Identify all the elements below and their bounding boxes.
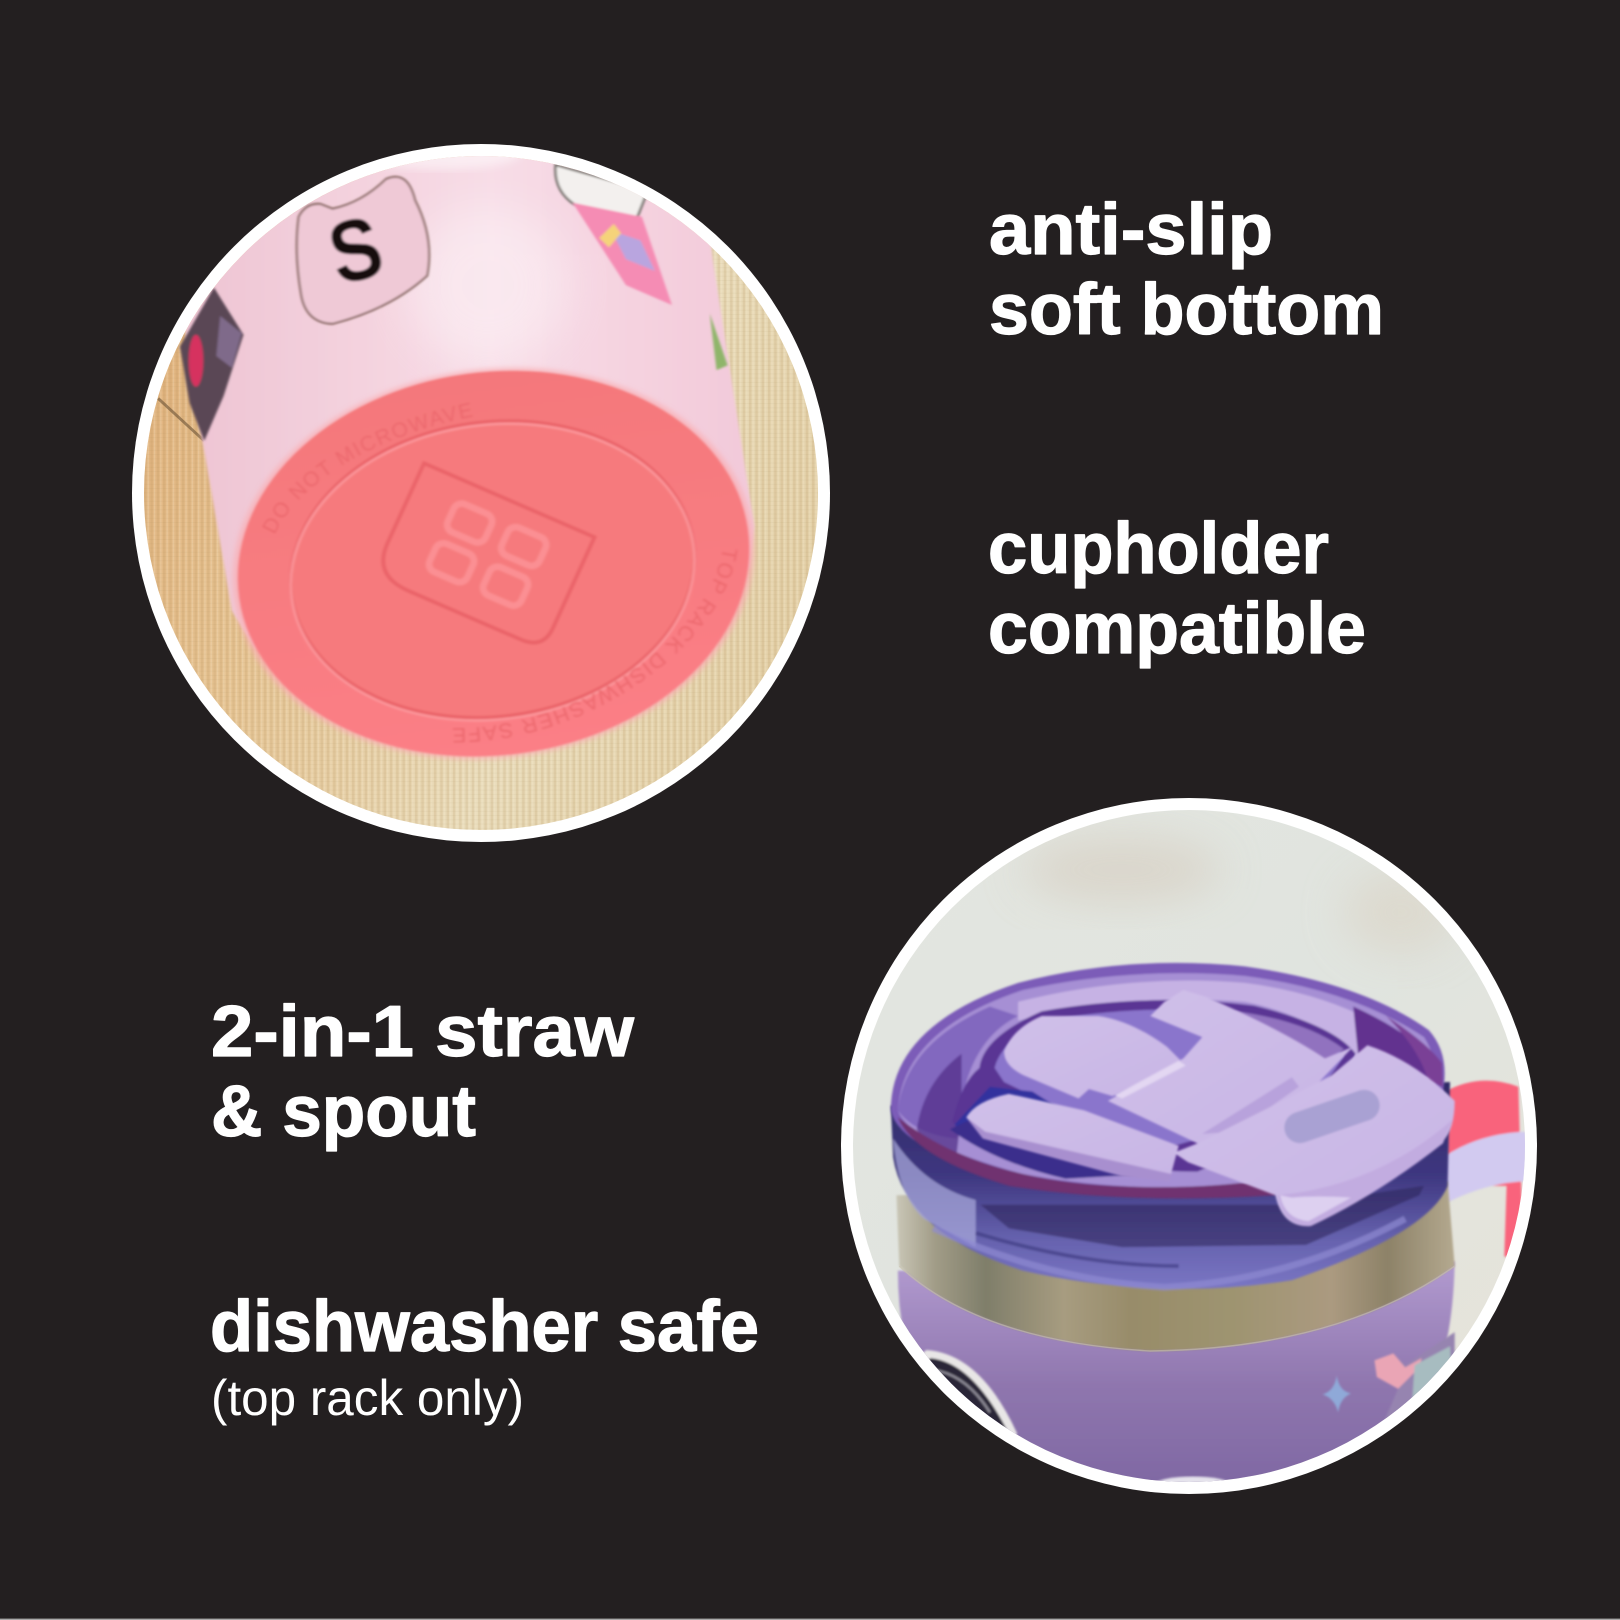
- cup body: [898, 1261, 1455, 1488]
- text: 2-in-1 straw and spout: 2-in-1 straw: [211, 992, 635, 1072]
- recess: [952, 1000, 1356, 1172]
- text: 2-in-1 straw and spout: & spout: [211, 1072, 476, 1152]
- decal: unicorn: [1374, 1332, 1456, 1419]
- top highlight: [394, 156, 516, 170]
- logo: [373, 463, 595, 649]
- decal: sparkle: [1323, 1376, 1351, 1412]
- text: dishwasher safe: [210, 1287, 759, 1426]
- cup body: [173, 120, 754, 649]
- wall background: [853, 810, 1525, 1480]
- embossed wording: DO NOT MICROWAVE: [263, 404, 470, 533]
- hinge latch: [1174, 1045, 1455, 1226]
- embossed wording: TOP RACK DISHWASHER SAFE: [454, 551, 737, 742]
- decal: ice-cream cone: [555, 165, 672, 305]
- lid rim: right corner: [1352, 1006, 1428, 1078]
- lid rim: upper lilac ring: [1017, 980, 1359, 1056]
- decal: bottom white mark: [1158, 1476, 1226, 1482]
- decal: green sliver: [710, 313, 728, 370]
- lid rim: left ring: [898, 1007, 1018, 1139]
- body highlight: [412, 220, 562, 353]
- text: 2-in-1 straw and spout: [211, 992, 635, 1152]
- text: cupholder compatible: cupholder: [988, 509, 1329, 589]
- embossed wording: [263, 404, 737, 742]
- decal: dark sticker: [923, 1348, 1018, 1435]
- lid rim: wine front edge: [898, 1117, 1275, 1198]
- steel band: [896, 1181, 1455, 1351]
- silicone base: [232, 366, 756, 761]
- panel: photo of anti-slip soft bottom: [132, 144, 830, 842]
- straw cap: [1004, 1016, 1181, 1099]
- flip lid and straw spout: [966, 990, 1455, 1226]
- handle: [1447, 1079, 1525, 1258]
- spout cap: [1108, 990, 1353, 1143]
- front tab: [966, 1094, 1179, 1181]
- text: cupholder compatible: [988, 509, 1366, 669]
- table edge line: [158, 398, 204, 441]
- text: anti-slip soft bottom: anti-slip: [989, 190, 1273, 270]
- steel bottom edge: [899, 1266, 1455, 1351]
- text: anti-slip soft bottom: [989, 190, 1384, 350]
- cloth surface: [144, 156, 818, 830]
- text: dishwasher safe: dishwasher safe: [210, 1287, 759, 1367]
- lid rim: [891, 963, 1445, 1198]
- slider button: [1284, 1090, 1380, 1144]
- decal: left dark sticker: [180, 288, 243, 441]
- clear lid side wall: [891, 1082, 1450, 1289]
- decal: bear tag with letter: S: [319, 198, 392, 304]
- text: anti-slip soft bottom: soft bottom: [989, 270, 1384, 350]
- text: dishwasher safe: (top rack only): [211, 1370, 524, 1426]
- decal: bear tag with letter: [297, 177, 429, 324]
- text: cupholder compatible: compatible: [988, 589, 1366, 669]
- inner ring: [294, 419, 692, 720]
- panel: photo of straw and spout lid: [841, 798, 1537, 1494]
